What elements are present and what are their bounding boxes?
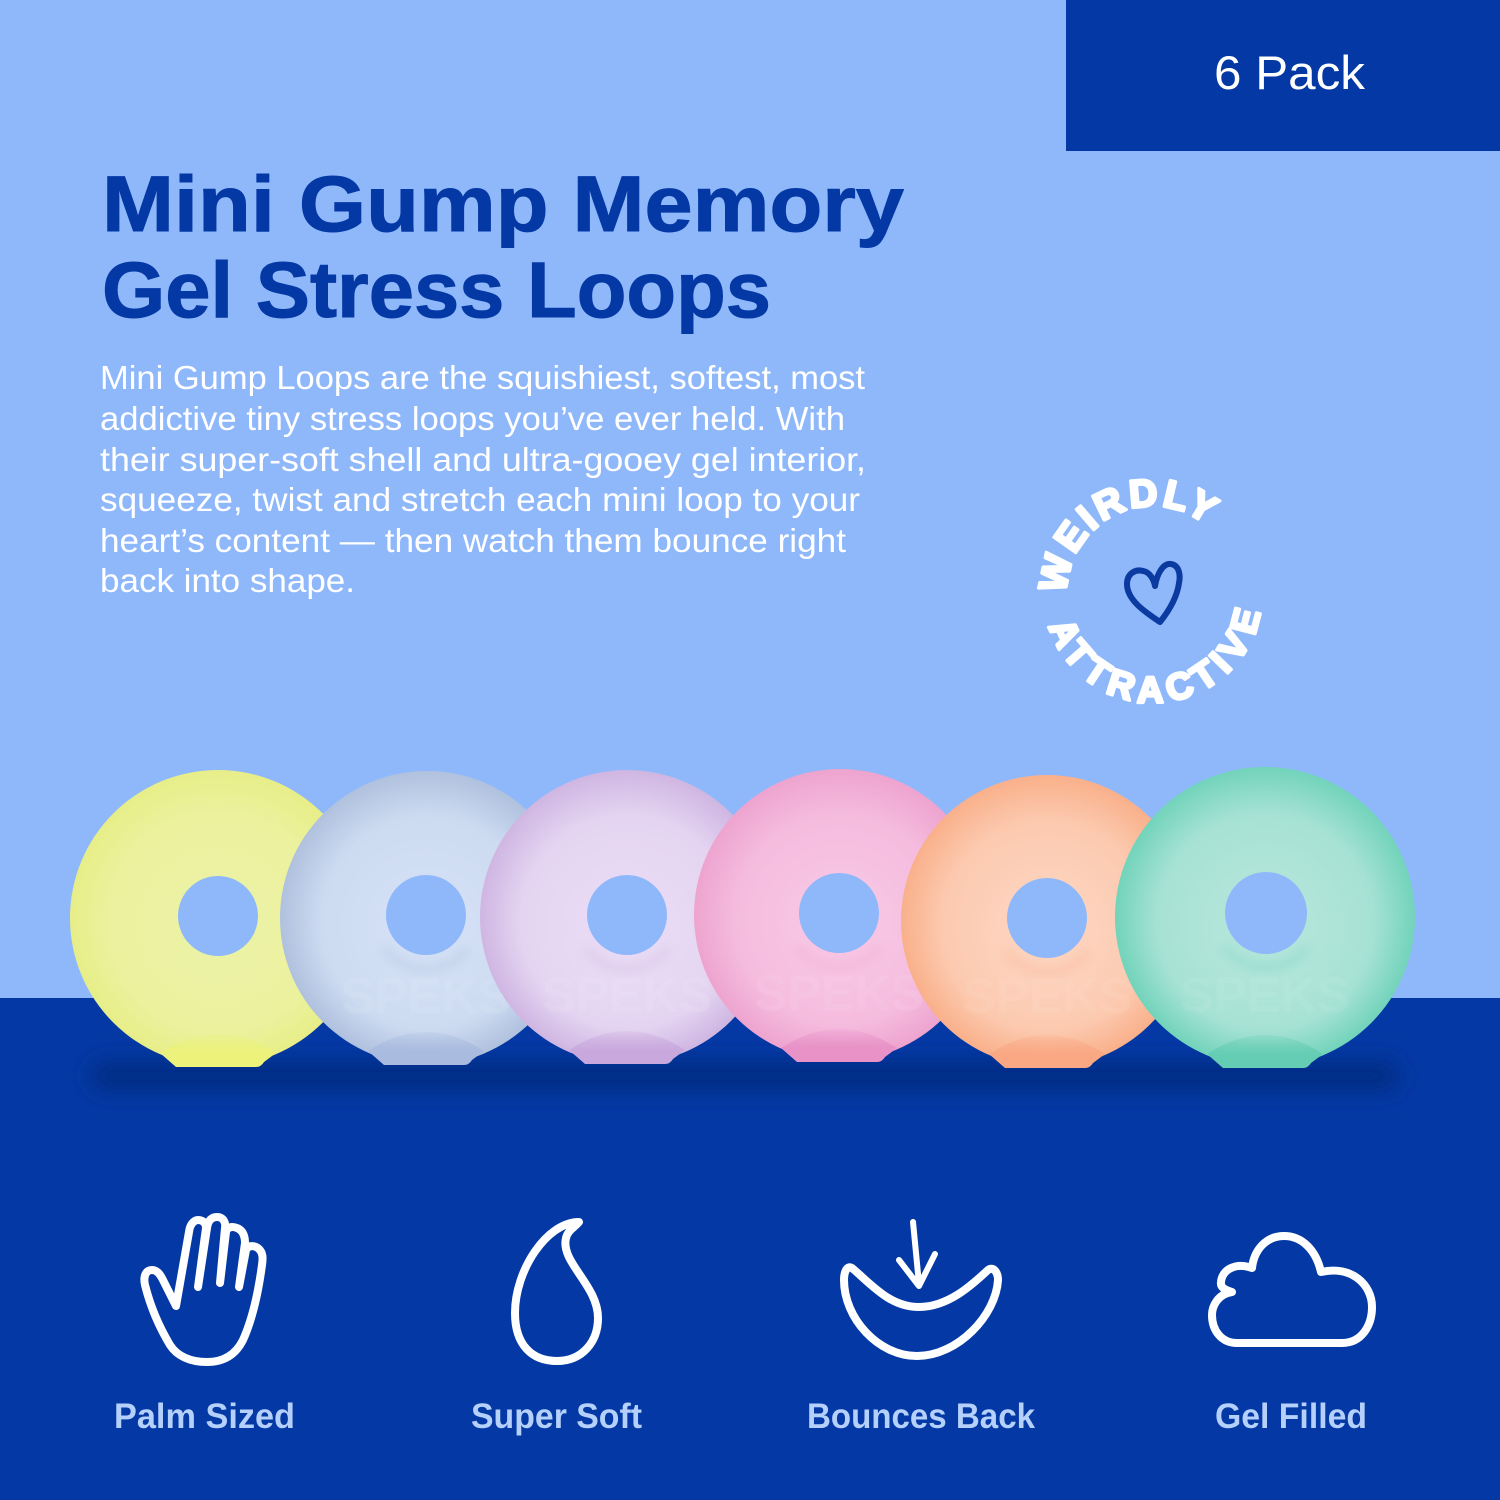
stamp: Weirdly Attractive xyxy=(1037,478,1262,704)
background: light blue upper area xyxy=(0,0,1500,998)
background: dark blue lower area xyxy=(0,998,1500,1500)
loop: peach: SPEKS xyxy=(962,968,1132,1024)
badge: 6 Pack: 6 Pack xyxy=(1214,46,1366,99)
icon: hand xyxy=(144,1217,263,1362)
feature: Palm Sized xyxy=(114,1217,295,1436)
loop: lilac xyxy=(480,770,774,1064)
loop: periwinkle xyxy=(280,771,574,1065)
title: Mini Gump Memory xyxy=(102,159,904,248)
loop: pink: SPEKS xyxy=(754,965,924,1021)
icon: pressed loop with arrow xyxy=(844,1222,998,1356)
floor shadow xyxy=(90,1062,1400,1090)
icon: cloud xyxy=(1212,1236,1372,1343)
loop: lilac: SPEKS xyxy=(542,967,712,1023)
feature: Super Soft xyxy=(471,1222,642,1436)
description text: Mini Gump Loops are the squishiest, softest, most xyxy=(100,359,865,396)
description text: heart’s content — then watch them bounce right xyxy=(100,522,846,559)
loop: peach xyxy=(901,775,1193,1068)
icon: drop xyxy=(515,1222,598,1361)
product row: six gel loops xyxy=(70,767,1415,1090)
description text: addictive tiny stress loops you’ve ever held. With xyxy=(100,400,845,437)
label: Palm Sized xyxy=(114,1397,295,1436)
badge: 6 Pack xyxy=(1066,0,1500,151)
stamp text: Weirdly: WEIRDLY xyxy=(1037,478,1222,590)
loop: periwinkle: SPEKS xyxy=(341,968,511,1024)
label: Gel Filled xyxy=(1215,1397,1367,1436)
icon: heart xyxy=(1127,564,1180,622)
loop: yellow xyxy=(70,770,366,1067)
description text: their super-soft shell and ultra-gooey gel interior, xyxy=(100,441,866,478)
description text: back into shape. xyxy=(100,562,355,599)
feature: Bounces Back xyxy=(807,1222,1035,1436)
label: Super Soft xyxy=(471,1397,642,1436)
title: Gel Stress Loops xyxy=(102,245,771,334)
description text xyxy=(100,359,866,599)
loop: mint xyxy=(1115,767,1415,1068)
feature: Gel Filled xyxy=(1212,1236,1372,1436)
title xyxy=(102,159,904,334)
label: Bounces Back xyxy=(807,1397,1035,1436)
stamp text: Attractive: ATTRACTIVE xyxy=(1046,606,1262,704)
description text: squeeze, twist and stretch each mini loop to your xyxy=(100,481,860,518)
loop: mint: SPEKS xyxy=(1180,967,1350,1023)
loop: pink xyxy=(694,769,986,1062)
